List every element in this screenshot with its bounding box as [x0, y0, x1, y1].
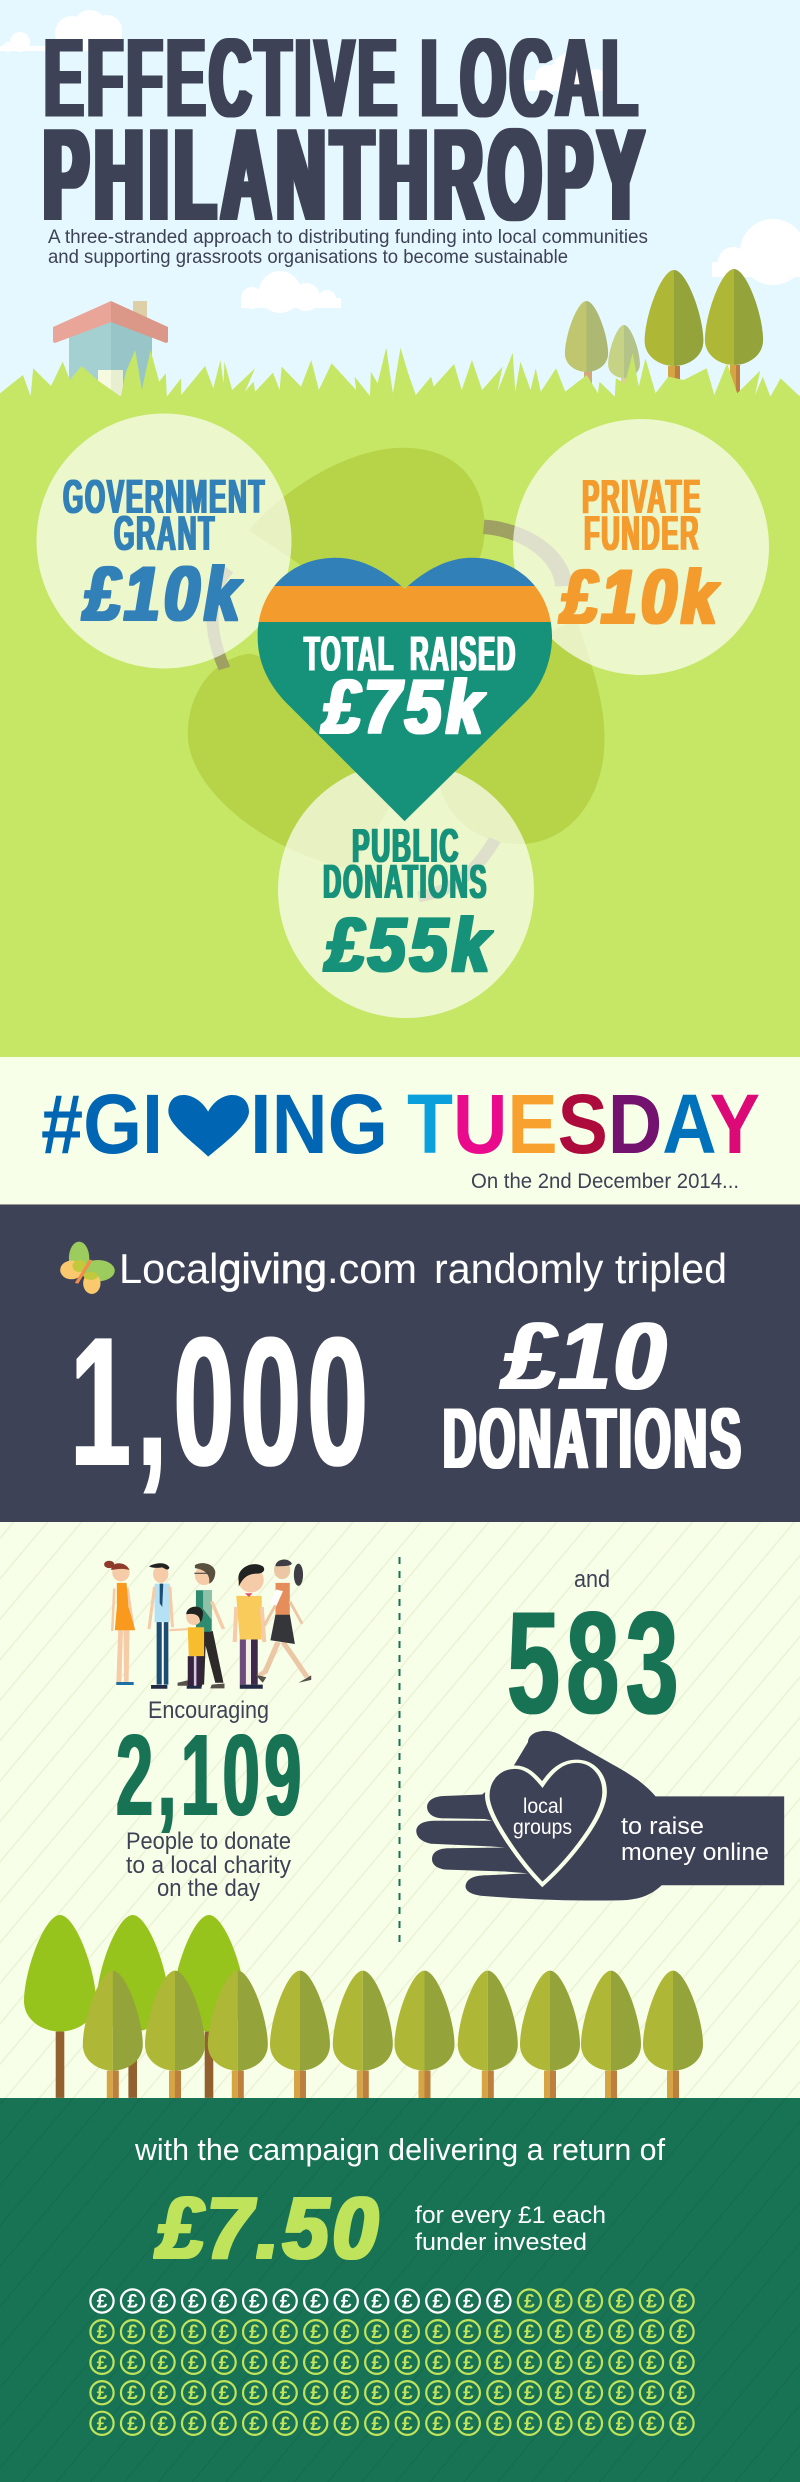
- stat: 2,109: 2,109: [116, 1710, 306, 1840]
- subtitle: A three-stranded approach to distributing funding into local communities: [48, 226, 648, 248]
- heading: localgiving randomly tripled: Localgiving.com: [119, 1245, 417, 1292]
- icon: heart: [168, 1095, 249, 1157]
- heart label: [513, 1795, 572, 1839]
- logo: #giving tuesday: [41, 1077, 760, 1171]
- label: public donations: £55k: [324, 903, 494, 988]
- trees: hill top: [565, 269, 763, 394]
- heading: localgiving randomly tripled: randomly tripled: [434, 1245, 727, 1292]
- panel: community and groups: [0, 1522, 800, 2098]
- subtitle: [48, 226, 648, 268]
- illustration: group of people: [104, 1560, 311, 1689]
- heart label: groups: [513, 1816, 572, 1839]
- child: [169, 1607, 204, 1689]
- cloud: top left: [0, 10, 122, 52]
- encouraging label: Encouraging: [148, 1697, 269, 1724]
- people description: People to donate: [126, 1828, 291, 1855]
- and label: and: [574, 1566, 610, 1593]
- grass field: [0, 348, 800, 1057]
- coin grid: ££££££££££££££££££££: [97, 2414, 688, 2435]
- ring arcs: [212, 527, 564, 897]
- clover blobs: [188, 448, 605, 869]
- cloud: behind title: [525, 53, 610, 91]
- subtitle: and supporting grassroots organisations to become sustainable: [48, 246, 568, 268]
- cloud: right: [712, 219, 800, 285]
- return description: for every £1 each: [415, 2202, 606, 2229]
- date line: On the 2nd December 2014...: [471, 1170, 739, 1193]
- circle: government grant: [36, 414, 292, 668]
- people description: [126, 1828, 291, 1902]
- trees: back row: [24, 1915, 245, 2098]
- label: government grant: £10k: [82, 552, 244, 637]
- icon: house: [53, 301, 168, 400]
- heart: total raised: [258, 558, 552, 821]
- stat: £7.50: £7.50: [154, 2180, 382, 2277]
- label: public donations: DONATIONS: [323, 856, 488, 909]
- label: private funder: £10k: [559, 555, 721, 640]
- cloud: middle: [241, 271, 341, 313]
- label: private funder: FUNDER: [584, 507, 700, 561]
- divider: dashed line: [398, 1557, 400, 1942]
- label: government grant: GRANT: [114, 507, 216, 561]
- coin grid: ££££££££££££££££££££: [97, 2322, 688, 2343]
- panel: funding clover diagram: [36, 414, 769, 1018]
- hand label: money online: [621, 1839, 769, 1866]
- trees: front row: [83, 1971, 703, 2098]
- man in yellow shirt: [235, 1564, 264, 1689]
- coin grid: ££££££££££££££: [97, 2292, 505, 2312]
- icon: butterfly logo: [60, 1242, 115, 1294]
- hand label: to raise: [621, 1813, 704, 1840]
- title: [44, 16, 650, 247]
- label: total raised: [304, 628, 517, 750]
- sky background: [0, 0, 800, 400]
- panel: giving tuesday: [0, 1057, 800, 1205]
- people description: to a local charity: [126, 1852, 291, 1879]
- label: public donations: [323, 820, 494, 988]
- logo: #giving tuesday: ING: [250, 1077, 388, 1171]
- icon: hand holding heart: [416, 1731, 784, 1901]
- stat: 583: 583: [507, 1581, 685, 1744]
- coin grid: ££££££: [524, 2292, 688, 2312]
- label: public donations: PUBLIC: [352, 820, 460, 873]
- people description: on the day: [157, 1875, 260, 1902]
- return description: funder invested: [415, 2229, 587, 2256]
- heading: return: with the campaign delivering a return of: [134, 2132, 665, 2167]
- label: private funder: PRIVATE: [582, 471, 702, 524]
- panel: localgiving: [0, 1205, 800, 1522]
- coin grid: [90, 2289, 694, 2435]
- label: government grant: [63, 471, 266, 637]
- logo: #giving tuesday: TUESDAY: [407, 1077, 760, 1171]
- heading: localgiving randomly tripled: [119, 1245, 727, 1292]
- woman in orange dress: [104, 1561, 135, 1685]
- stat: 1,000: 1,000: [70, 1298, 374, 1504]
- logo: #giving tuesday: #GI: [41, 1077, 163, 1171]
- panel: campaign return: [0, 2098, 800, 2482]
- label: government grant: GOVERNMENT: [63, 471, 266, 524]
- label: private funder: [559, 471, 721, 640]
- label: total raised: TOTAL: [304, 628, 395, 682]
- return description: [415, 2202, 606, 2256]
- hand label: [621, 1813, 769, 1866]
- woman walking: [255, 1560, 311, 1683]
- man with glasses: [178, 1563, 224, 1688]
- man with tie: [149, 1563, 172, 1689]
- stat: £10 donations: [443, 1303, 744, 1487]
- circle: public donations: [278, 762, 534, 1018]
- stat: £10 donations: £10: [500, 1303, 669, 1410]
- coin grid: ££££££££££££££££££££: [97, 2353, 688, 2374]
- coin grid: ££££££££££££££££££££: [97, 2383, 688, 2404]
- circle: private funder: [513, 419, 769, 675]
- label: total raised: RAISED: [410, 628, 517, 682]
- heart label: local: [523, 1795, 563, 1818]
- label: total raised: £75k: [321, 665, 487, 750]
